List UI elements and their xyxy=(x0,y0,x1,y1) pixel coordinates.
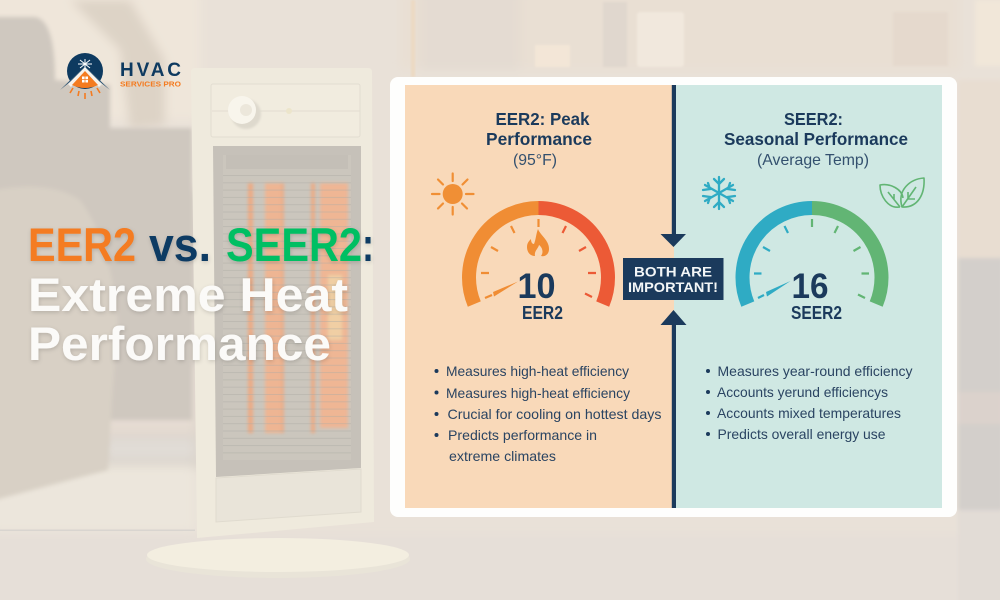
arrow: top divider pointing down xyxy=(660,85,686,247)
list: EER2 bullets: Crucial for cooling on hottest days xyxy=(448,406,662,422)
chart: EER2 gauge: 10 xyxy=(518,267,556,306)
icon: sun xyxy=(432,174,474,214)
title: : xyxy=(362,218,374,271)
icon: flame xyxy=(527,229,549,256)
logo xyxy=(60,53,181,99)
panel: SEER2 right column: Seasonal Performance xyxy=(724,129,908,149)
logo: SERVICES PRO xyxy=(120,80,181,88)
panel: EER2 left column: (95°F) xyxy=(513,152,557,169)
logo: HVAC xyxy=(120,60,181,81)
list: SEER2 bullets: Predicts overall energy use xyxy=(718,426,886,442)
panel: SEER2 right column: (Average Temp) xyxy=(757,152,869,169)
list: SEER2 bullets xyxy=(706,363,912,442)
icon: snowflake xyxy=(703,177,735,209)
chart: EER2 gauge: EER2 xyxy=(522,303,563,323)
title: Performance xyxy=(28,317,331,370)
list: SEER2 bullets: Accounts mixed temperatures xyxy=(717,405,901,421)
list: SEER2 bullets: Measures year-round efficiency xyxy=(718,363,912,379)
title: vs. xyxy=(149,218,211,271)
list: SEER2 bullets: Accounts yerund efficiencys xyxy=(717,384,888,400)
callout: both are important: IMPORTANT! xyxy=(628,279,718,295)
chart: SEER2 gauge xyxy=(743,208,881,323)
panel: comparison card xyxy=(390,77,957,517)
chart: SEER2 gauge: SEER2 xyxy=(791,303,842,323)
panel: SEER2 right column xyxy=(703,109,924,442)
list: EER2 bullets: Measures high-heat efficiency xyxy=(446,363,629,379)
title: EER2 xyxy=(28,218,136,271)
title: SEER2 xyxy=(226,218,362,271)
icon: leaves xyxy=(880,178,924,207)
panel: EER2 left column: EER2: Peak xyxy=(496,109,590,129)
callout: both are important: BOTH ARE xyxy=(634,264,712,280)
panel: SEER2 right column: SEER2: xyxy=(784,109,843,129)
heater illustration xyxy=(146,68,410,578)
callout: both are important xyxy=(623,258,724,300)
chart: EER2 gauge xyxy=(469,208,608,323)
list: EER2 bullets: extreme climates xyxy=(449,448,556,464)
list: EER2 bullets xyxy=(434,363,662,464)
list: EER2 bullets: Measures high-heat efficiency xyxy=(446,385,630,401)
panel: EER2 left column: Performance xyxy=(486,129,592,149)
chart: SEER2 gauge: 16 xyxy=(792,267,828,306)
panel: EER2 left column xyxy=(432,109,662,464)
title xyxy=(28,218,374,370)
list: EER2 bullets: Predicts performance in xyxy=(448,427,597,443)
arrow: bottom divider pointing up xyxy=(660,310,686,508)
title: Extreme Heat xyxy=(28,268,348,321)
